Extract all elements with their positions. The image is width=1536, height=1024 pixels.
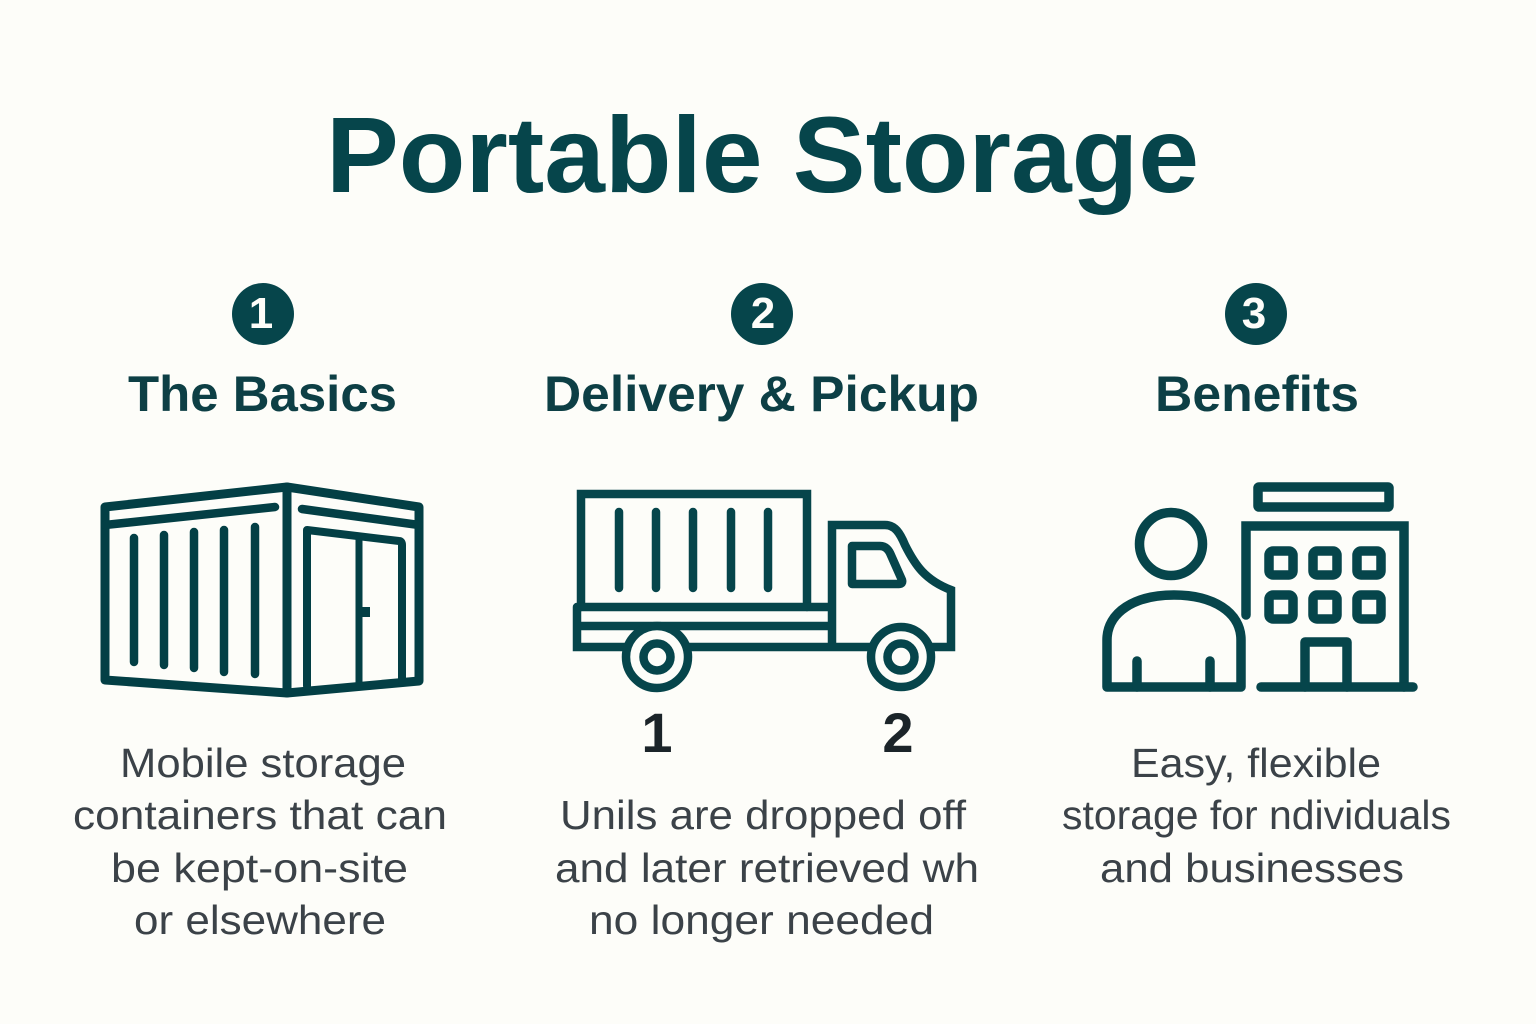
number badge 1: 1 [249,289,273,338]
number badge 3: 3 [1242,289,1266,338]
panel: benefits [1062,283,1451,891]
number badge 2 [731,283,793,345]
truck label 2: 2 [882,701,914,764]
icon: office building [1246,487,1413,687]
description: benefits [1062,740,1451,891]
wheel: rear [626,626,688,688]
number badge 1 [232,283,294,345]
panel: delivery and pickup [544,283,979,943]
heading: benefits: Benefits [1155,366,1359,422]
description: the basics [73,740,447,943]
description: delivery and pickup: Unils are dropped off [560,792,967,838]
description: benefits: Easy, flexible [1131,740,1381,786]
panel: the basics [73,283,447,943]
description: delivery and pickup: no longer needed [589,897,934,943]
truck label 1: 1 [641,701,673,764]
description: the basics: Mobile storage [120,740,406,786]
description: the basics: containers that can [73,792,447,838]
heading: delivery and pickup: Delivery & Pickup [544,366,979,422]
description: benefits: storage for ndividuals [1062,792,1451,838]
description: delivery and pickup [555,792,979,943]
number badge 2: 2 [751,289,775,338]
icon: person [1107,512,1241,687]
description: the basics: or elsewhere [134,897,386,943]
description: delivery and pickup: and later retrieved wh [555,845,979,891]
wheel: front [871,627,931,687]
description: the basics: be kept-on-site [111,845,408,891]
icon: delivery truck [577,494,951,688]
icon: storage container [105,487,419,693]
number badge 3 [1225,283,1287,345]
heading: the basics: The Basics [128,366,397,422]
description: benefits: and businesses [1100,845,1404,891]
title: Portable Storage [326,94,1199,215]
